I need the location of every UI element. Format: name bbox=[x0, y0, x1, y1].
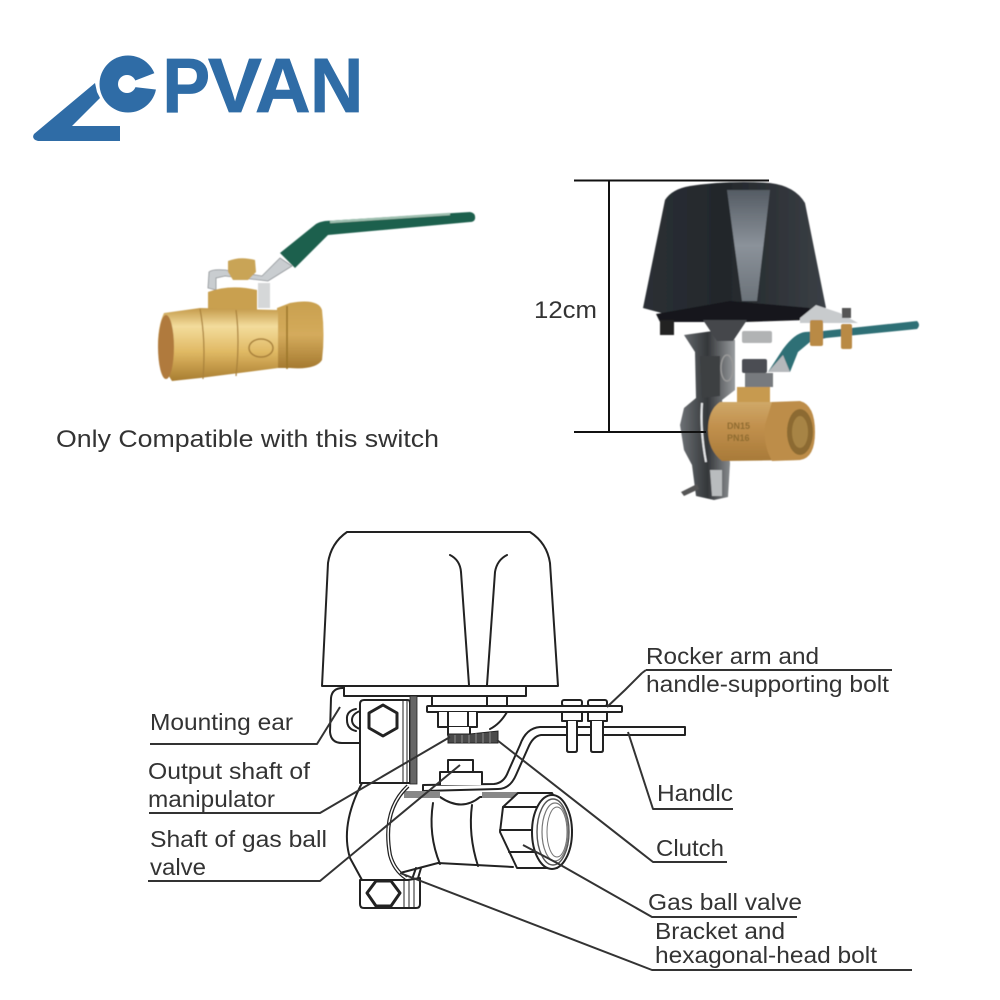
logo wordmark: N bbox=[310, 43, 363, 128]
clamp bbox=[347, 783, 421, 885]
valve handle bbox=[280, 212, 475, 268]
rocker plate bbox=[800, 305, 858, 323]
label: rocker arm: Rocker arm and bbox=[646, 643, 819, 669]
housing highlight bbox=[727, 190, 770, 301]
label: handle: Handlc bbox=[657, 780, 733, 806]
handle-supporting bolts bbox=[562, 700, 607, 752]
diagram: manipulator mounted on gas ball valve bbox=[322, 532, 685, 908]
housing cap bbox=[322, 532, 558, 686]
valve top nut bbox=[228, 258, 256, 280]
lower bracket and bolt bbox=[360, 878, 420, 908]
label: mounting ear: Mounting ear bbox=[150, 709, 293, 735]
spring bbox=[660, 320, 674, 335]
caption: Only Compatible with this switch bbox=[56, 426, 439, 453]
label: bracket: Bracket and bbox=[655, 918, 785, 944]
rocker arm plate bbox=[427, 706, 622, 712]
valve body bbox=[400, 791, 522, 873]
label: bracket bbox=[655, 918, 878, 968]
valve hex coupling bbox=[500, 793, 572, 869]
shaft cone bbox=[703, 320, 747, 341]
label: shaft of valve bbox=[150, 826, 327, 880]
collar nut bbox=[842, 308, 851, 318]
leader lines bbox=[148, 670, 912, 970]
output shaft nut bbox=[438, 712, 477, 727]
logo: CPVAN bbox=[33, 43, 363, 141]
screw bbox=[681, 484, 699, 496]
label: clutch: Clutch bbox=[656, 835, 724, 861]
handle bbox=[768, 321, 919, 372]
logo wordmark bbox=[162, 43, 363, 129]
mounting ear bbox=[330, 688, 360, 743]
valve stamp: DN15 bbox=[727, 421, 750, 431]
labels bbox=[148, 643, 890, 968]
photo: brass ball valve bbox=[158, 212, 475, 381]
label: rocker arm: handle-supporting bolt bbox=[646, 671, 890, 697]
dimension: 12cm bbox=[534, 180, 769, 432]
under plate and spacers bbox=[344, 687, 526, 706]
logo wordmark: P bbox=[162, 43, 210, 129]
valve body bbox=[158, 308, 278, 381]
brass collars bbox=[810, 320, 823, 346]
valve stamp: PN16 bbox=[727, 433, 750, 443]
label: output shaft: manipulator bbox=[148, 786, 275, 812]
valve stem and nut bbox=[440, 760, 482, 785]
housing base bbox=[656, 301, 810, 322]
label: shaft of valve: valve bbox=[150, 854, 206, 880]
valve lever arm bbox=[208, 258, 292, 290]
brass valve bbox=[737, 387, 770, 405]
photo: manipulator on valve bbox=[643, 182, 919, 500]
clutch bbox=[448, 731, 498, 743]
upper bracket bbox=[360, 696, 417, 784]
handle bbox=[423, 727, 685, 791]
icon: logo C mark bbox=[33, 56, 160, 141]
logo wordmark: A bbox=[255, 43, 311, 129]
valve stamp bbox=[727, 421, 750, 443]
label: bracket: hexagonal-head bolt bbox=[655, 942, 878, 968]
logo wordmark: V bbox=[208, 43, 262, 129]
label: output shaft bbox=[148, 758, 311, 812]
actuator housing bbox=[643, 182, 826, 318]
label: shaft of valve: Shaft of gas ball bbox=[150, 826, 327, 852]
label: rocker arm bbox=[646, 643, 890, 697]
valve right nut bbox=[277, 302, 324, 368]
bolt and nuts bbox=[742, 331, 772, 343]
label: output shaft: Output shaft of bbox=[148, 758, 311, 784]
bracket bbox=[680, 330, 735, 500]
label: gas ball valve: Gas ball valve bbox=[648, 889, 802, 915]
dimension value: 12cm bbox=[534, 297, 597, 324]
valve neck bbox=[208, 287, 257, 316]
